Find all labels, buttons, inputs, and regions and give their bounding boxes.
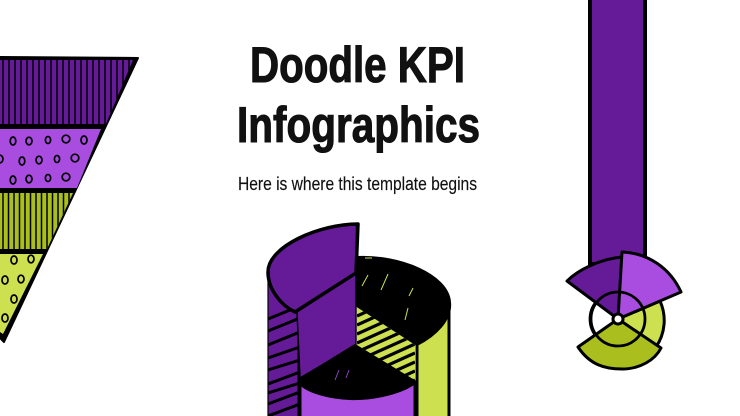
cylinder: medium purple base — [301, 385, 415, 416]
cylinder chart — [268, 224, 450, 416]
radial sector: dark purple — [567, 257, 622, 319]
cylinder: lime hatched face — [357, 307, 415, 380]
subtitle: Here is where this template begins — [238, 174, 477, 194]
title: Infographics — [237, 97, 480, 153]
radial centre dot — [613, 314, 623, 324]
title — [237, 37, 480, 153]
funnel band: medium purple dotted — [0, 129, 101, 188]
cylinder: lime right side — [417, 300, 449, 416]
radial inner ring — [591, 292, 645, 346]
cylinder: purple front face — [297, 272, 356, 378]
radial sector: olive — [578, 319, 661, 369]
radial sector: light lime — [618, 301, 664, 347]
radial sector: white — [590, 301, 618, 337]
cylinder: raised purple slice — [268, 224, 358, 312]
funnel chart — [0, 57, 138, 342]
purple vertical bar — [590, 0, 645, 264]
radial sector: medium purple — [618, 252, 681, 319]
cylinder: black scribbled wedge — [300, 345, 416, 399]
title: Doodle KPI — [250, 37, 465, 93]
cylinder: black scribbled top — [357, 257, 450, 345]
funnel band: lime dotted — [0, 254, 43, 334]
radial chart — [567, 252, 681, 369]
funnel band: dark purple striped — [0, 60, 133, 124]
cylinder: dark purple hatched side — [268, 275, 300, 416]
funnel band: olive striped — [0, 193, 73, 249]
